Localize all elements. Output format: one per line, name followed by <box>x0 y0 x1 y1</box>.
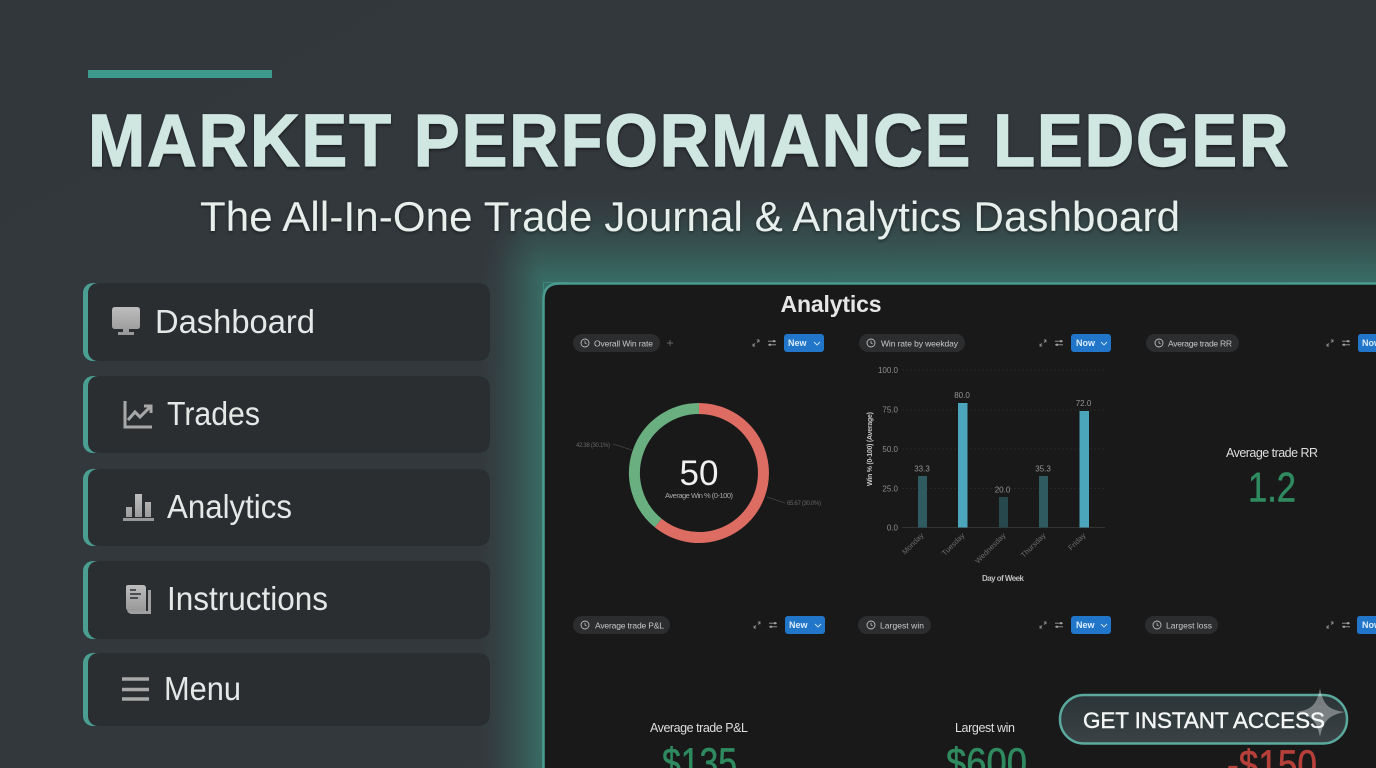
widget header: Win rate by weekday <box>881 338 959 348</box>
bar chart: 33.3 <box>914 464 930 474</box>
metric: RR: Average trade RR <box>1226 446 1318 460</box>
widget: average trade RR <box>1146 334 1376 510</box>
bar chart: Friday <box>1066 531 1088 552</box>
nav item: Trades <box>83 376 490 453</box>
metric: RR <box>1226 446 1318 510</box>
panel heading: Analytics <box>780 291 882 317</box>
donut chart: 42.38 (30.1%) <box>576 443 610 449</box>
widget: largest win <box>858 616 1111 768</box>
bar chart: Win % (0-100) (Average) <box>867 412 874 486</box>
widget: win rate by weekday <box>859 334 1111 583</box>
icon: document <box>126 585 148 612</box>
title: MARKET PERFORMANCE LEDGER <box>88 100 1289 183</box>
widget header <box>573 616 825 634</box>
icon: bar chart <box>123 494 154 521</box>
call to action button <box>1060 695 1347 744</box>
widget header: Average trade RR <box>1168 338 1232 348</box>
widget header: New <box>788 338 808 348</box>
title accent bar <box>88 70 272 78</box>
widget header: Largest loss <box>1166 620 1212 630</box>
bar chart <box>867 366 1105 583</box>
panel: analytics dashboard <box>544 284 1376 768</box>
metric: RR: 1.2 <box>1248 464 1296 510</box>
metric: P&L: Average trade P&L <box>650 721 748 735</box>
widget header <box>1146 334 1376 352</box>
bar chart: Thursday <box>1019 531 1048 560</box>
bar chart: Monday <box>900 531 926 556</box>
label: Dashboard: Dashboard <box>155 303 315 340</box>
label: Menu: Menu <box>164 670 241 707</box>
donut chart: 50 <box>680 454 718 493</box>
nav item: Analytics <box>83 469 490 546</box>
bar chart: 80.0 <box>954 391 970 400</box>
icon: line chart <box>125 401 152 427</box>
bar chart: 75.0 <box>882 406 899 414</box>
donut chart: Average Win % (0-100) <box>665 491 734 500</box>
widget: average trade P&L <box>573 616 825 768</box>
subtitle: The All-In-One Trade Journal & Analytics Dashboard <box>200 193 1180 240</box>
panel glow <box>480 190 1376 768</box>
icon: monitor <box>112 307 140 335</box>
metric: largest win <box>946 721 1027 768</box>
widget header <box>573 334 824 352</box>
nav item: Dashboard <box>83 283 490 361</box>
widget header <box>858 616 1111 634</box>
metric: largest win: Largest win <box>955 721 1015 735</box>
widget header <box>1145 616 1376 634</box>
label: Analytics: Analytics <box>167 488 292 525</box>
widget header: Largest win <box>880 620 924 630</box>
widget header: Overall Win rate <box>594 338 653 348</box>
widget header: Average trade P&L <box>595 620 664 630</box>
nav item: Instructions <box>83 561 490 639</box>
label: Instructions: Instructions <box>167 580 328 617</box>
bar chart: 100.0 <box>878 366 899 375</box>
bar chart: 50.0 <box>882 445 899 454</box>
bar chart: 25.0 <box>882 484 899 494</box>
icon: sparkle <box>1296 688 1345 737</box>
donut chart: 65.67 (30.0%) <box>787 501 821 507</box>
nav item: Menu <box>83 653 490 726</box>
label: Trades: Trades <box>167 395 260 432</box>
widget: overall win rate <box>573 334 824 538</box>
widget header: New <box>789 620 809 630</box>
metric: P&L <box>650 721 748 768</box>
bar chart: Wednesday <box>973 531 1008 565</box>
bar chart: 20.0 <box>995 486 1011 494</box>
bar chart: 72.0 <box>1076 399 1092 408</box>
bar chart: Tuesday <box>940 531 967 558</box>
bar chart: 0.0 <box>887 524 899 532</box>
bar chart: Day of Week <box>982 574 1025 583</box>
widget header: Now <box>1076 338 1096 348</box>
widget header: New <box>1076 620 1096 630</box>
icon: hamburger <box>122 679 149 699</box>
donut chart <box>576 408 821 538</box>
widget: largest loss <box>1145 616 1376 768</box>
bar chart: 35.3 <box>1035 464 1051 474</box>
widget header <box>859 334 1111 352</box>
call to action button: GET INSTANT ACCESS <box>1083 708 1325 733</box>
